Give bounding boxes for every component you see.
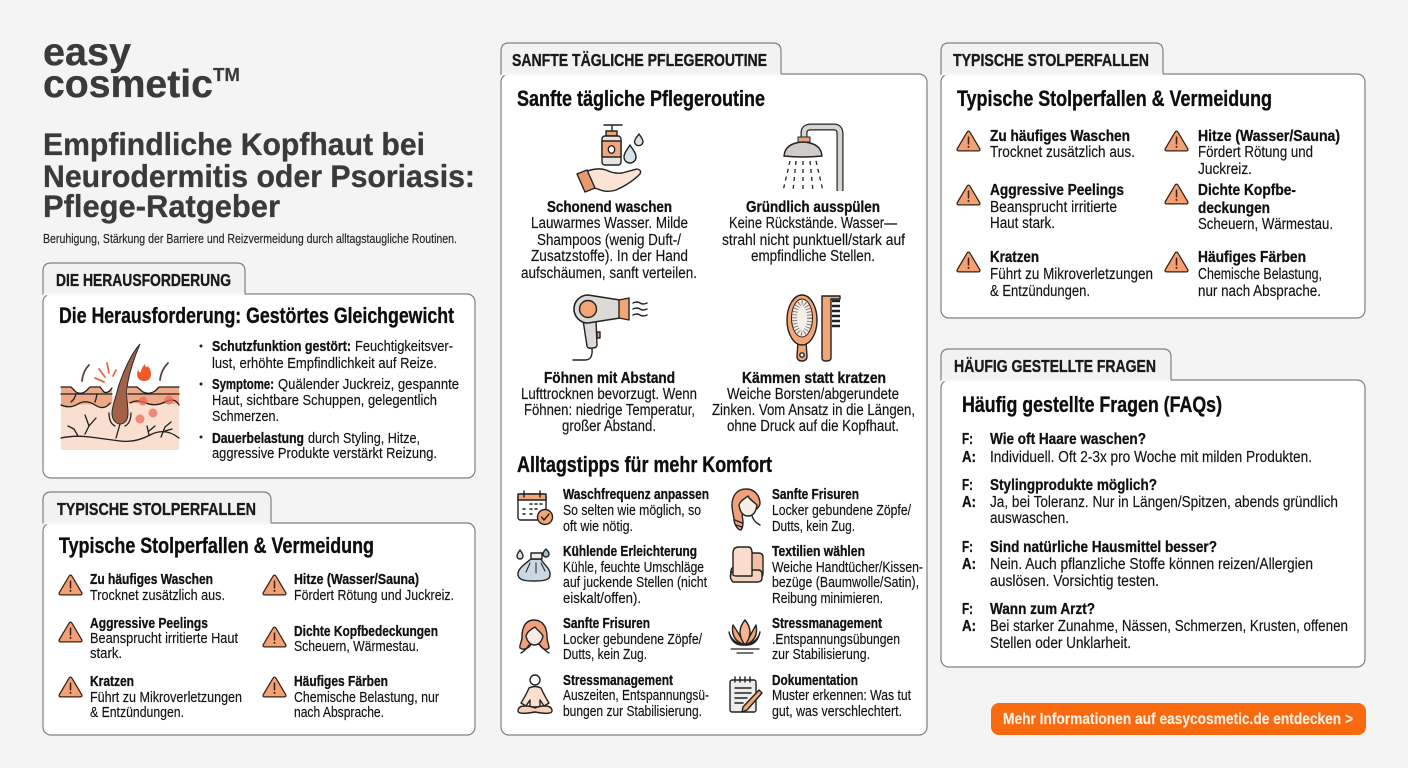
bullet list [200,339,459,462]
warning item: Häufiges Färben: nur nach Absprache. [1198,283,1321,300]
tip: Stressmanagement (lotus): Stressmanagement [772,616,882,632]
warning item: Aggressive Peelings [59,616,238,662]
warning item: Häufiges Färben: Häufiges Färben [1198,249,1306,266]
care step: Schonend waschen: Zusatzstoffe). In der Hand [531,248,688,265]
logo: cosmetic [43,63,213,106]
warning item: Aggressive Peelings: Beansprucht irritierte Haut [90,631,238,647]
tip: Kühlende Erleichterung: Kühle, feuchte Umschläge [563,560,704,576]
FAQ 3: A: [962,556,976,573]
title [43,126,475,224]
bullet list: Schutzfunktion gestört: [212,339,351,355]
care step: Föhnen mit Abstand: Lufttrocknen bevorzugt. Wenn [521,386,697,403]
bullet list: Symptome: [212,377,274,393]
panel: Typische Stolperfallen (right) [941,43,1365,318]
care step: Gründlich ausspülen: strahl nicht punktuell/stark auf [722,232,906,249]
tip: Waschfrequenz anpassen: So selten wie möglich, so [563,503,701,519]
tab: Häufig gestellte Fragen [941,349,1171,381]
illustration: irritated scalp cross-section [61,344,179,450]
icon: braided hair [732,489,760,530]
care step: Föhnen mit Abstand: großer Abstand. [562,418,656,435]
tip: Dokumentation: gut, was verschlechtert. [772,704,902,720]
tip: Dokumentation [730,673,911,720]
heading: Alltagstipps: Alltagstipps für mehr Komfort [517,452,773,477]
icon: brush and comb [787,295,840,361]
panel: Die Herausforderung [43,263,475,478]
logo [43,31,240,106]
icon: shampoo and hand [577,125,643,192]
heading: Sanfte tägliche Pflegeroutine [517,86,765,111]
bullet list: Feuchtigkeitsver- [355,339,453,355]
tip: Sanfte Frisuren (braid): Dutts, kein Zug. [772,519,855,535]
FAQ 4: Stellen oder Unklarheit. [990,635,1131,652]
care step: Föhnen mit Abstand [521,295,697,435]
icon: notepad and pen [730,677,762,712]
warning item: Dichte Kopfbedeckungen: Dichte Kopfbedeckungen [294,624,438,640]
care step: Gründlich ausspülen: empfindliche Stellen. [751,248,875,265]
warning item: Kratzen: & Entzündungen. [990,283,1090,300]
tip: Sanfte Frisuren (braid) [732,487,912,535]
heading: Typische Stolperfallen & Vermeidung [957,86,1272,111]
tab: Typische Stolperfallen: TYPISCHE STOLPERFALLEN [57,499,256,519]
care step: Gründlich ausspülen: Keine Rückstände. Wasser— [729,215,898,232]
logo: TM [213,65,240,85]
tip: Waschfrequenz anpassen [518,487,709,535]
tip: Sanfte Frisuren (braid): Sanfte Frisuren [772,487,859,503]
heading: Die Herausforderung: Gestörtes Gleichgewicht [59,303,455,328]
FAQ 2: auswaschen. [990,510,1069,527]
warning item: Häufiges Färben: Chemische Belastung, [1198,266,1322,283]
title: Neurodermitis oder Psoriasis: [43,158,475,194]
tip: Kühlende Erleichterung: auf juckende Stellen (nicht [563,575,707,591]
tab: Die Herausforderung: DIE HERAUSFORDERUNG [56,270,231,290]
warning item: Zu häufiges Waschen [957,128,1135,161]
warning item: Hitze: Hitze (Wasser/Sauna) [1198,128,1340,145]
tip: Stressmanagement: bungen zur Stabilisierung. [563,704,702,720]
FAQ 4: F: [962,601,973,618]
FAQ 4 [962,601,1348,652]
tip: Textilien wählen: Textilien wählen [772,544,865,560]
warning item: Häufiges Färben [1165,249,1322,300]
panel: FAQ [941,349,1365,667]
warning item: Hitze: Hitze (Wasser/Sauna) [294,572,419,588]
FAQ 1: A: [962,449,976,466]
FAQ 1: Wie oft Haare waschen? [990,431,1146,448]
warning item: Häufiges Färben: Häufiges Färben [294,674,388,690]
panel: Typische Stolperfallen (left) [43,492,475,735]
warning item: Hitze: Fördert Rötung und [1198,144,1313,161]
warning item: Kratzen: Kratzen [90,674,134,690]
icon: hair dryer [573,295,647,360]
warning item: Dichte Kopfbedeckungen: Dichte Kopfbe- [1198,182,1296,199]
panel: Sanfte tägliche Pflegeroutine [501,43,927,735]
icon: calendar [518,491,552,524]
warning item: Häufiges Färben: nach Absprache. [294,705,384,721]
tab: Häufig gestellte Fragen: HÄUFIG GESTELLTE FRAGEN [954,356,1156,376]
bullet list: lust, erhöhte Empfindlichkeit auf Reize. [212,356,437,372]
warning item: Häufiges Färben [263,674,439,721]
tab: Typische Stolperfallen [941,43,1163,75]
FAQ 4: Wann zum Arzt? [990,601,1095,618]
warning item: Aggressive Peelings: Haut stark. [990,215,1055,232]
tip: Kühlende Erleichterung: Kühlende Erleichterung [563,544,697,560]
warning item: Dichte Kopfbedeckungen [263,624,438,655]
FAQ 1 [962,431,1312,466]
tip: Stressmanagement (lotus) [729,616,900,663]
title: Pflege-Ratgeber [43,188,280,224]
warning item: Hitze [1165,128,1340,178]
care step: Schonend waschen [521,125,697,282]
FAQ 3: F: [962,539,973,556]
warning item: Zu häufiges Waschen: Trocknet zusätzlich aus. [990,144,1135,161]
heading: Typische Stolperfallen & Vermeidung [59,533,374,558]
care step: Schonend waschen: Schonend waschen [547,199,672,216]
FAQ 2: F: [962,477,973,494]
warning item: Kratzen [59,674,242,721]
tip: Textilien wählen [730,544,923,607]
tip: Waschfrequenz anpassen: oft wie nötig. [563,519,633,535]
care step: Kämmen statt kratzen: Zinken. Vom Ansatz in die Längen, [712,402,915,419]
care step: Schonend waschen: aufschäumen, sanft verteilen. [521,265,697,282]
FAQ 3: Sind natürliche Hausmittel besser? [990,539,1217,556]
warning item: Aggressive Peelings: stark. [90,646,122,662]
FAQ 3 [962,539,1313,590]
tip: Textilien wählen: bezüge (Baumwolle/Satin), [772,575,919,591]
tip: Waschfrequenz anpassen: Waschfrequenz anpassen [563,487,709,503]
logo: easy [43,31,132,74]
tip: Dokumentation: Dokumentation [772,673,858,689]
title: Empfindliche Kopfhaut bei [43,126,425,162]
care step: Kämmen statt kratzen [712,295,915,435]
icon: folded towels [730,547,763,582]
FAQ 2 [962,477,1338,527]
bullet list: durch Styling, Hitze, [308,431,420,447]
tab: Die Herausforderung [43,263,245,295]
care step: Föhnen mit Abstand: Föhnen mit Abstand [544,370,675,387]
tab: Typische Stolperfallen: TYPISCHE STOLPERFALLEN [953,50,1149,70]
FAQ 1: F: [962,431,973,448]
tab: Typische Stolperfallen [43,492,271,524]
subtitle: Beruhigung, Stärkung der Barriere und Reizvermeidung durch alltagstaugliche Routinen. [43,231,457,246]
warning item: Kratzen: & Entzündungen. [90,705,184,721]
FAQ 4: A: [962,618,976,635]
bullet list: aggressive Produkte verstärkt Reizung. [212,446,437,462]
warning item: Dichte Kopfbedeckungen: Scheuern, Wärmestau. [1198,216,1333,233]
FAQ 4: Bei starker Zunahme, Nässen, Schmerzen, Krusten, offenen [990,618,1348,635]
tip: Kühlende Erleichterung [517,544,707,607]
tip: Stressmanagement: Auszeiten, Entspannungsü- [563,688,709,704]
care step: Gründlich ausspülen: Gründlich ausspülen [746,199,880,216]
icon: shower [783,127,840,191]
warning item: Aggressive Peelings: Aggressive Peelings [90,616,208,632]
FAQ 1: Individuell. Oft 2-3x pro Woche mit milden Produkten. [990,449,1312,466]
icon: lotus [729,620,760,653]
warning item: Aggressive Peelings: Aggressive Peelings [990,182,1124,199]
warning item: Aggressive Peelings: Beansprucht irritierte [990,199,1117,216]
warning item: Kratzen: Kratzen [990,249,1039,266]
warning item: Zu häufiges Waschen: Zu häufiges Waschen [90,572,213,588]
tip: Stressmanagement [518,673,709,720]
warning item: Zu häufiges Waschen [59,572,225,604]
warning item: Kratzen [957,249,1153,300]
call to action button [991,703,1366,735]
FAQ 2: Stylingprodukte möglich? [990,477,1157,494]
tab: Sanfte tägliche Pflegeroutine [501,43,781,75]
tip: Sanfte Frisuren: Sanfte Frisuren [563,616,650,632]
tip: Dokumentation: Muster erkennen: Was tut [772,688,911,704]
heading: Häufig gestellte Fragen (FAQs) [962,392,1222,417]
warning item: Hitze: Fördert Rötung und Juckreiz. [294,588,454,604]
warning item: Häufiges Färben: Chemische Belastung, nur [294,690,439,706]
care step: Föhnen mit Abstand: Föhnen: niedrige Temperatur, [524,402,695,419]
tip: Sanfte Frisuren: Locker gebundene Zöpfe/ [563,632,703,648]
warning item: Zu häufiges Waschen: Trocknet zusätzlich aus. [90,588,225,604]
care step: Kämmen statt kratzen: ohne Druck auf die Kopfhaut. [727,418,899,435]
tab: Sanfte tägliche Pflegeroutine: SANFTE TÄGLICHE PFLEGEROUTINE [512,50,767,70]
warning item: Dichte Kopfbedeckungen: Scheuern, Wärmestau. [294,639,419,655]
FAQ 3: auslösen. Vorsichtig testen. [990,573,1159,590]
tip: Sanfte Frisuren: Dutts, kein Zug. [563,647,647,663]
care step: Schonend waschen: Lauwarmes Wasser. Milde [531,215,688,232]
call to action button: Mehr Informationen auf easycosmetic.de entdecken > [1003,711,1353,728]
warning item: Kratzen: Führt zu Mikroverletzungen [990,266,1153,283]
warning item: Zu häufiges Waschen: Zu häufiges Waschen [990,128,1130,145]
warning item: Hitze [263,572,454,604]
icon: meditating person [518,675,552,713]
bullet list: Haut, sichtbare Schuppen, gelegentlich [212,393,437,409]
care step: Schonend waschen: Shampoos (wenig Duft-/ [537,232,682,249]
warning item: Hitze: Juckreiz. [1198,161,1252,178]
FAQ 3: Nein. Auch pflanzliche Stoffe können reizen/Allergien [990,556,1313,573]
care step: Kämmen statt kratzen: Weiche Borsten/abgerundete [727,386,899,403]
bullet list: Schmerzen. [212,409,279,425]
warning item: Kratzen: Führt zu Mikroverletzungen [90,690,242,706]
bullet list: Dauerbelastung [212,431,304,447]
tip: Stressmanagement (lotus): zur Stabilisierung. [772,647,870,663]
tip: Sanfte Frisuren [520,616,703,663]
tip: Kühlende Erleichterung: eiskalt/offen). [563,591,641,607]
warning item: Dichte Kopfbedeckungen: deckungen [1198,200,1270,217]
tip: Stressmanagement: Stressmanagement [563,673,673,689]
FAQ 2: A: [962,494,976,511]
tip: Textilien wählen: Weiche Handtücher/Kissen- [772,560,923,576]
icon: loose hair [520,620,549,653]
care step: Gründlich ausspülen [722,127,906,265]
warning item: Aggressive Peelings [957,182,1124,232]
care step: Kämmen statt kratzen: Kämmen statt kratzen [742,370,886,387]
tip: Sanfte Frisuren (braid): Locker gebundene Zöpfe/ [772,503,912,519]
tip: Stressmanagement (lotus): .Entspannungsübungen [772,632,900,648]
FAQ 2: Ja, bei Toleranz. Nur in Längen/Spitzen, abends gründlich [990,494,1338,511]
warning item: Dichte Kopfbedeckungen [1165,182,1333,233]
icon: cooling pack [517,549,550,581]
bullet list: Quälender Juckreiz, gespannte [278,377,459,393]
tip: Textilien wählen: Reibung minimieren. [772,591,883,607]
